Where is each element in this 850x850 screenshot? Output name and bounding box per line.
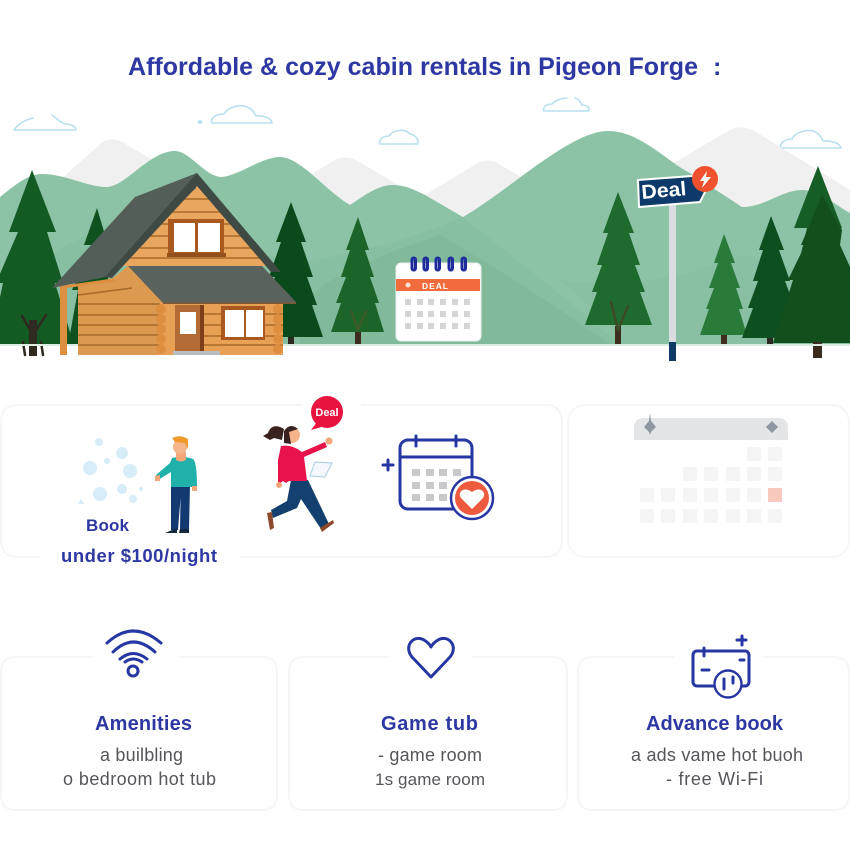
cabin log walls: [78, 266, 165, 355]
heading: advance book: Advance book: [646, 713, 784, 735]
text: advance book details: [631, 745, 803, 789]
cabin door: [175, 305, 204, 352]
icon: heart: [409, 638, 453, 677]
text: book under $100/night: under $100/night: [61, 545, 217, 566]
text: advance book details: - free Wi-Fi: [666, 769, 763, 789]
icon: calendar with heart: [400, 436, 493, 519]
clouds: [14, 98, 841, 148]
heading: amenities: Amenities: [95, 713, 192, 735]
tree: far left: [0, 170, 74, 356]
deal signpost: Deal: [641, 178, 687, 204]
text: book under $100/night: Book: [86, 516, 130, 535]
panel: landscape scene: [0, 98, 850, 361]
tree: right of cabin: [259, 202, 323, 345]
tree: right group front: [773, 195, 850, 358]
text: amenities details: o bedroom hot tub: [63, 769, 216, 789]
deal signpost: [638, 166, 718, 361]
tree: right centre: [585, 192, 652, 345]
cabin porch roof: [128, 266, 296, 303]
illustration: woman with deal bubble: Deal: [315, 407, 339, 419]
text: game tub details: - game room: [378, 745, 482, 765]
snow ground: [0, 344, 850, 346]
plus sign: [383, 460, 393, 470]
gray distant mountains: [60, 127, 850, 240]
panel: advance book: [578, 636, 849, 810]
text: book under $100/night: [61, 516, 217, 566]
illustration: man: [155, 436, 197, 533]
panel: amenities: [1, 631, 277, 810]
cabin step: [173, 351, 220, 355]
panel: game tub: [289, 638, 567, 810]
heading: game tub: Game tub: [381, 713, 478, 735]
calendar in scene: [396, 258, 481, 341]
text: advance book details: a ads vame hot buoh: [631, 745, 803, 765]
tree: behind cabin: [68, 208, 108, 345]
icon: plug board: [693, 636, 749, 698]
cabin gable wall: [122, 182, 268, 266]
illustration: woman with deal bubble: [263, 396, 343, 532]
cabin corner logs: [60, 288, 283, 355]
cabin: [52, 173, 296, 355]
text: game tub details: 1s game room: [375, 770, 485, 789]
tree: right group medium: [742, 216, 800, 345]
tree: right of cabin small: [331, 217, 384, 344]
cabin main roof: [52, 173, 197, 288]
text: game tub details: [375, 745, 485, 789]
tree: right group small: [700, 234, 747, 344]
title: Affordable & cozy cabin rentals in Pigeon Forge: [128, 53, 698, 81]
cabin lower window: [221, 306, 265, 340]
calendar in scene: DEAL: [422, 281, 448, 291]
icon: wifi: [107, 631, 161, 676]
cabin upper window: [167, 219, 226, 257]
text: amenities details: [63, 745, 216, 789]
green mountain range: [0, 131, 850, 345]
tree: right group dark back: [790, 166, 850, 300]
icon: bubbles: [78, 438, 143, 504]
panel: faded calendar: [568, 405, 849, 557]
title: :: [713, 53, 721, 81]
mid mountain layers: [0, 217, 850, 345]
panel: booking deals outline: [1, 405, 562, 557]
text: amenities details: a builbling: [100, 745, 183, 765]
